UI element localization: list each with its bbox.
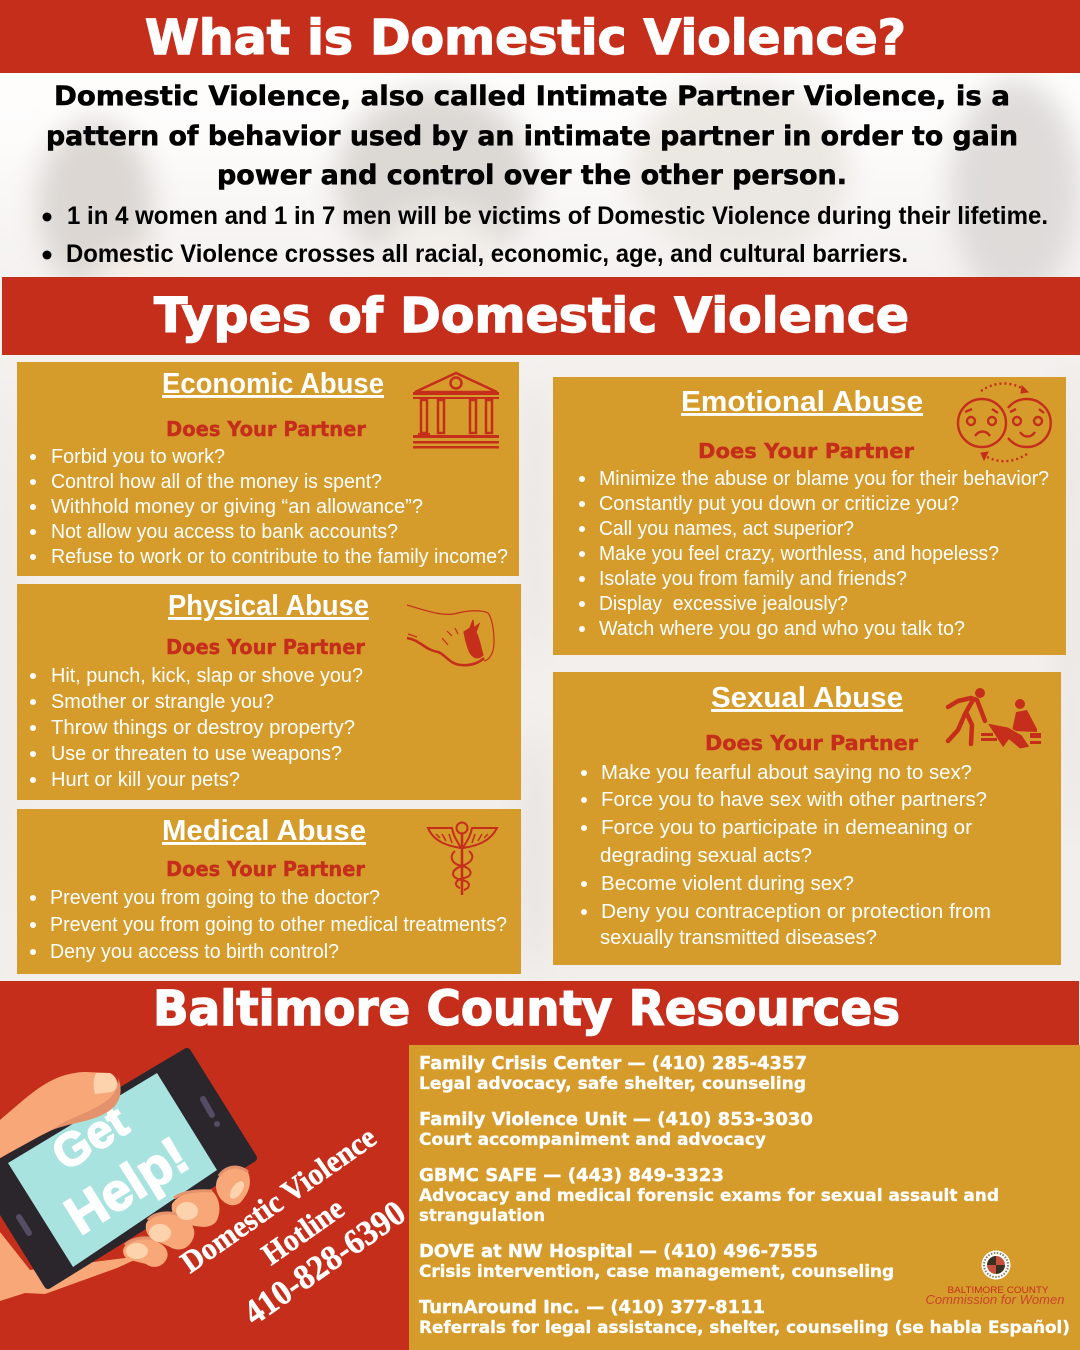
resource: turnaround inc xyxy=(419,1297,1070,1337)
panel: economic abuse xyxy=(17,362,519,576)
resource: family violence unit: Court accompaniment and advocacy xyxy=(419,1130,766,1149)
panel: physical abuse: Does Your Partner xyxy=(166,635,365,659)
logo: baltimore county commission for women: Commission for Women xyxy=(926,1292,1064,1307)
key facts list: 1 in 4 women and 1 in 7 men will be victims of Domestic Violence during their lifetime. xyxy=(67,202,1048,230)
hotline callout: 410-828-6390 xyxy=(236,1193,413,1333)
economic abuse list xyxy=(30,445,508,568)
emotional abuse list xyxy=(579,467,1049,640)
hotline callout: Hotline xyxy=(255,1190,350,1272)
resource: dove at nw hospital: Crisis intervention, case management, counseling xyxy=(419,1262,894,1281)
resource: family violence unit: Family Violence Unit — (410) 853-3030 xyxy=(419,1109,813,1130)
banner background xyxy=(0,0,1080,73)
panel: emotional abuse: Does Your Partner xyxy=(698,439,914,463)
illustration: hand holding phone: Get xyxy=(42,1094,137,1180)
section banner: types of domestic violence xyxy=(2,277,1080,355)
medical abuse list: Prevent you from going to other medical treatments? xyxy=(50,913,507,936)
emotional abuse list: Minimize the abuse or blame you for their behavior? xyxy=(599,467,1049,490)
physical abuse list: Throw things or destroy property? xyxy=(51,716,355,739)
medical abuse list: Prevent you from going to the doctor? xyxy=(50,886,380,909)
resource: family crisis center xyxy=(419,1053,807,1093)
emotional abuse list: Isolate you from family and friends? xyxy=(599,567,907,590)
panel: physical abuse xyxy=(17,584,521,800)
section: baltimore county resources xyxy=(0,981,1080,1350)
definition text: power and control over the other person. xyxy=(217,160,847,191)
sexual abuse list: Become violent during sex? xyxy=(601,872,854,895)
title banner xyxy=(0,0,1080,73)
hotline callout xyxy=(174,1119,413,1333)
resource: gbmc safe: strangulation xyxy=(419,1206,545,1225)
sexual abuse list xyxy=(581,761,991,949)
emotional abuse list: Constantly put you down or criticize you? xyxy=(599,492,959,515)
icon: two figures xyxy=(948,688,1041,749)
panel: economic abuse: Economic Abuse xyxy=(162,368,384,400)
panel: sexual abuse xyxy=(553,672,1061,965)
emotional abuse list: Call you names, act superior? xyxy=(599,517,854,540)
logo: baltimore county commission for women: BALTIMORE COUNTY xyxy=(948,1285,1049,1296)
illustration: hand holding phone xyxy=(0,1052,253,1301)
sexual abuse list: Make you fearful about saying no to sex? xyxy=(601,761,972,784)
icon: clenched fist xyxy=(407,605,494,665)
economic abuse list: Control how all of the money is spent? xyxy=(51,470,382,493)
title text: What is Domestic Violence? xyxy=(145,10,906,66)
emotional abuse list: Watch where you go and who you talk to? xyxy=(599,617,965,640)
panel: medical abuse: Medical Abuse xyxy=(162,815,366,847)
panel: medical abuse: Does Your Partner xyxy=(166,857,365,881)
key facts list xyxy=(42,202,1048,268)
physical abuse list: Smother or strangle you? xyxy=(51,690,274,713)
sexual abuse list: Force you to have sex with other partners? xyxy=(601,788,987,811)
resource: turnaround inc: TurnAround Inc. — (410) 377-8111 xyxy=(419,1297,765,1318)
logo: baltimore county commission for women xyxy=(926,1250,1064,1307)
physical abuse list: Use or threaten to use weapons? xyxy=(51,742,342,765)
icon: sad and happy faces xyxy=(958,384,1051,461)
economic abuse list: Withhold money or giving “an allowance”? xyxy=(51,495,423,518)
section heading: Baltimore County Resources xyxy=(153,981,900,1037)
economic abuse list: Forbid you to work? xyxy=(51,445,225,468)
panel: emotional abuse: Emotional Abuse xyxy=(681,386,923,418)
emotional abuse list: Display excessive jealously? xyxy=(599,592,848,615)
economic abuse list: Not allow you access to bank accounts? xyxy=(51,520,398,543)
sexual abuse list: Force you to participate in demeaning or xyxy=(601,816,972,839)
key facts list: Domestic Violence crosses all racial, economic, age, and cultural barriers. xyxy=(66,240,908,268)
panel: sexual abuse: Sexual Abuse xyxy=(711,682,903,714)
panel: emotional abuse xyxy=(553,377,1066,655)
definition text xyxy=(46,81,1018,191)
panel: sexual abuse: Does Your Partner xyxy=(705,731,918,755)
illustration: hand holding phone: Help! xyxy=(55,1126,199,1246)
physical abuse list: Hit, punch, kick, slap or shove you? xyxy=(51,664,363,687)
physical abuse list xyxy=(30,664,363,791)
physical abuse list: Hurt or kill your pets? xyxy=(51,768,240,791)
medical abuse list xyxy=(30,886,507,963)
emotional abuse list: Make you feel crazy, worthless, and hopeless? xyxy=(599,542,999,565)
resource: turnaround inc: Referrals for legal assistance, shelter, counseling (se habla Español) xyxy=(419,1318,1070,1337)
sexual abuse list: sexually transmitted diseases? xyxy=(600,926,877,949)
panel: resources list xyxy=(409,1045,1080,1350)
medical abuse list: Deny you access to birth control? xyxy=(50,940,339,963)
resource: gbmc safe xyxy=(419,1165,999,1225)
hotline callout: Domestic Violence xyxy=(174,1119,382,1280)
sexual abuse list: Deny you contraception or protection from xyxy=(601,900,991,923)
resource: family crisis center: Family Crisis Center — (410) 285-4357 xyxy=(419,1053,807,1074)
sexual abuse list: degrading sexual acts? xyxy=(600,844,812,867)
panel: medical abuse xyxy=(17,809,521,974)
banner background xyxy=(2,277,1080,355)
icon: bank building xyxy=(413,373,499,448)
section background xyxy=(0,981,1079,1350)
resource: gbmc safe: Advocacy and medical forensic exams for sexual assault and xyxy=(419,1186,999,1205)
resource: gbmc safe: GBMC SAFE — (443) 849-3323 xyxy=(419,1165,724,1186)
resource: family crisis center: Legal advocacy, safe shelter, counseling xyxy=(419,1074,806,1093)
panel: physical abuse: Physical Abuse xyxy=(168,590,369,622)
resource: dove at nw hospital: DOVE at NW Hospital — (410) 496-7555 xyxy=(419,1241,818,1262)
panel: economic abuse: Does Your Partner xyxy=(166,417,366,441)
resource: dove at nw hospital xyxy=(419,1241,894,1281)
economic abuse list: Refuse to work or to contribute to the family income? xyxy=(51,545,508,568)
icon: caduceus xyxy=(428,822,497,895)
section heading: Types of Domestic Violence xyxy=(154,288,909,344)
definition text: pattern of behavior used by an intimate partner in order to gain xyxy=(46,121,1018,152)
resource: family violence unit xyxy=(419,1109,813,1149)
definition text: Domestic Violence, also called Intimate Partner Violence, is a xyxy=(54,81,1010,112)
